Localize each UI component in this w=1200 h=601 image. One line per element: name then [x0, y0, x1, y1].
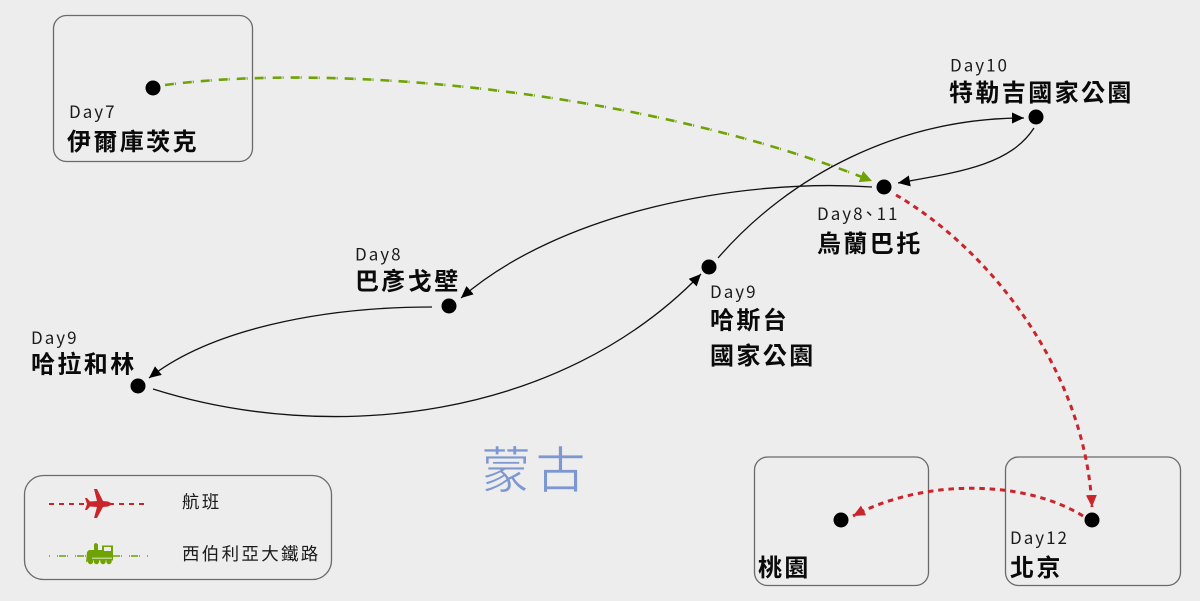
- stop: Irkutsk: 伊爾庫茨克: [67, 122, 199, 157]
- route: Gobi to Karakorum: [149, 307, 432, 378]
- route: Ulaanbaatar to Gobi: [461, 186, 872, 298]
- stop: Irkutsk: Day7: [69, 98, 117, 123]
- legend: railway text: 西伯利亞大鐵路: [182, 541, 321, 566]
- stop: Hustai: 國家公園: [710, 336, 816, 371]
- stop: Hustai: 哈斯台: [710, 300, 789, 336]
- stop: Terelj: Day10: [950, 52, 1009, 76]
- icon: train: [86, 543, 113, 564]
- legend: railway line: [49, 555, 148, 557]
- legend: flight line: [49, 503, 145, 505]
- route: flight Beijing to Taoyuan: [853, 488, 1083, 516]
- stop: Ulaanbaatar: 烏蘭巴托: [817, 224, 923, 259]
- stop: Gobi: Day8: [355, 240, 403, 266]
- route: Siberian railway to Ulaanbaatar: [165, 78, 872, 181]
- stop: Gobi: [355, 240, 461, 314]
- stop: Terelj: [949, 52, 1134, 124]
- panel: Taoyuan box: [754, 457, 928, 586]
- panel: Beijing box: [1006, 457, 1180, 586]
- stop: Terelj: 特勒吉國家公園: [949, 73, 1134, 108]
- stop: Ulaanbaatar: Day8、11: [817, 200, 899, 225]
- stop: Irkutsk: [67, 80, 199, 157]
- panel: Irkutsk box: [54, 16, 252, 162]
- stop: Ulaanbaatar: [817, 180, 923, 259]
- route: flight Ulaanbaatar to Beijing: [896, 195, 1092, 507]
- stop: Taoyuan: 桃園: [758, 548, 811, 583]
- stop: Beijing: Day12: [1010, 524, 1069, 549]
- route: Karakorum to Hustai: [153, 274, 701, 417]
- stop: Taoyuan: [758, 512, 848, 583]
- stop: Beijing: [1010, 512, 1100, 583]
- stop: Gobi: 巴彥戈壁: [355, 262, 461, 296]
- route: Terelj to Ulaanbaatar: [898, 128, 1034, 183]
- heading: Mongolia: 蒙古: [481, 431, 590, 503]
- legend: flight text: 航班: [182, 489, 222, 514]
- icon: plane: [85, 489, 113, 518]
- route: Hustai to Terelj: [718, 118, 1024, 258]
- stop: Karakorum: 哈拉和林: [31, 344, 137, 380]
- stop: Hustai: Day9: [710, 278, 758, 303]
- stop: Beijing: 北京: [1010, 548, 1063, 583]
- stop: Karakorum: Day9: [31, 324, 79, 349]
- stop: Karakorum: [31, 324, 146, 394]
- panel: legend: [24, 476, 332, 580]
- stop: Hustai: [702, 260, 816, 371]
